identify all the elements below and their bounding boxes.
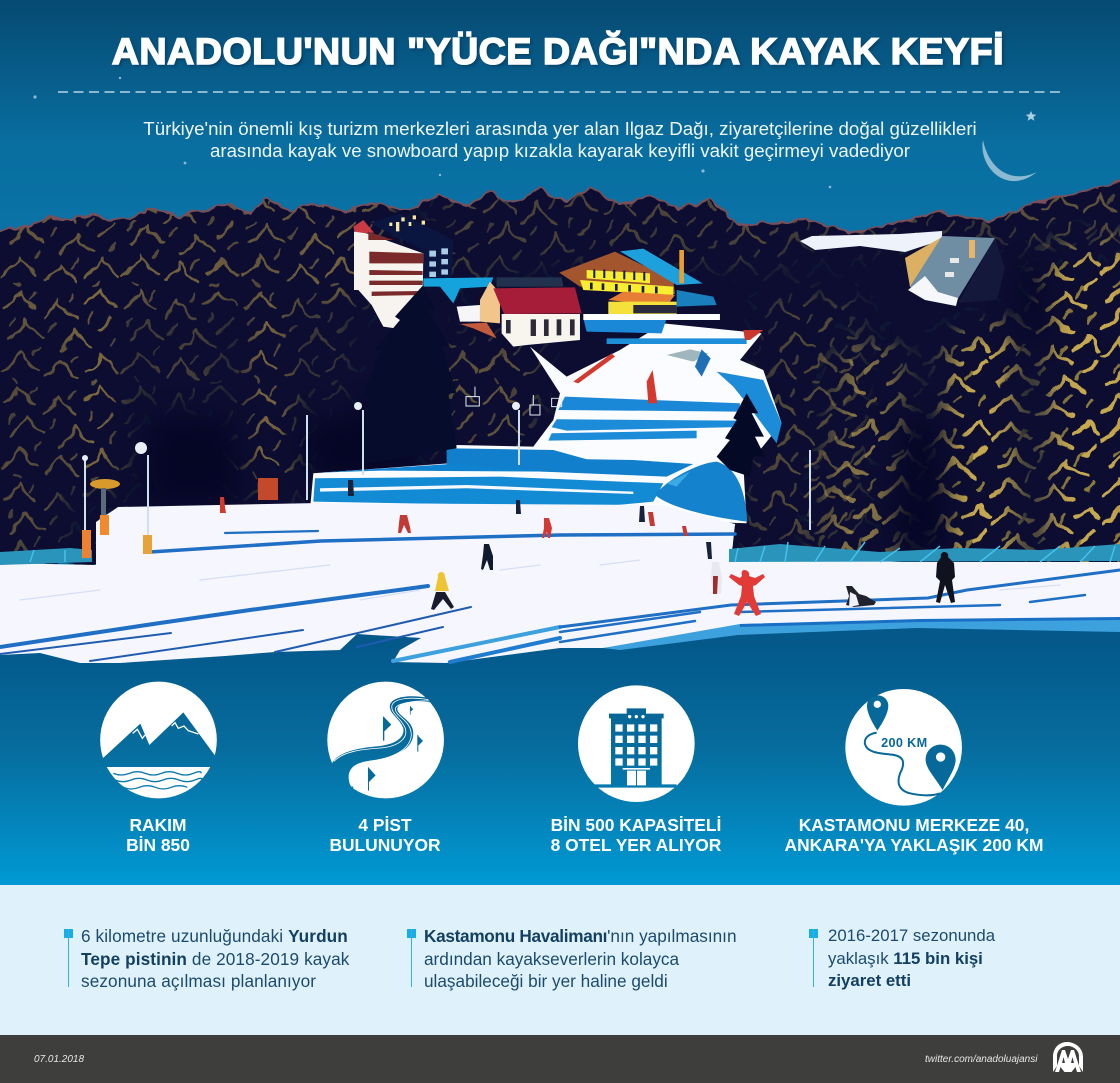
- icon: route map with pins: 200 KM: [881, 736, 927, 750]
- label: distance: [785, 815, 1043, 855]
- subtitle: [143, 118, 977, 161]
- fact: Yurdun Tepe: sezonuna açılması planlanıyor: [81, 971, 316, 991]
- skier red: [729, 570, 765, 616]
- buildings: [353, 213, 765, 477]
- skier yellow: [435, 572, 449, 591]
- icon: mountain and lake: [93, 682, 223, 798]
- subtitle: arasında kayak ve snowboard yapıp kızakla kayarak keyifli vakit geçirmeyi vadediyor: [210, 140, 910, 160]
- lamp posts: [82, 402, 810, 555]
- main snowfield: [0, 503, 1120, 663]
- label: pistes: [329, 815, 441, 855]
- forest brown highlights: [0, 187, 1120, 565]
- forest golden highlights: [785, 220, 1120, 562]
- dashed divider: [58, 91, 1063, 93]
- yellow chalet: [559, 249, 717, 315]
- fact: Kastamonu airport: [407, 926, 737, 991]
- fact: Yurdun Tepe: Tepe pistinin de 2018-2019 kayak: [81, 949, 349, 969]
- label: hotels: 8 OTEL YER ALIYOR: [551, 835, 721, 855]
- skier dark: [936, 552, 955, 603]
- sky: [0, 0, 1120, 262]
- social handle: twitter.com/anadoluajansi: [925, 1054, 1037, 1065]
- footer bar: [0, 1035, 1120, 1083]
- label: altitude: RAKIM: [130, 815, 186, 835]
- forest: [0, 179, 1120, 565]
- ski slope: [310, 318, 782, 523]
- label: distance: ANKARA'YA YAKLAŞIK 200 KM: [785, 835, 1043, 855]
- fact: visitors: [809, 926, 996, 990]
- fact: Yurdun Tepe: 6 kilometre uzunluğundaki Yurdun: [81, 926, 348, 946]
- lower gradient band: [0, 600, 1120, 885]
- chair lifts: [466, 387, 562, 415]
- fact: Kastamonu airport: Kastamonu Havalimanı'nın yapılmasının: [424, 926, 737, 946]
- hillside hotel right: [905, 236, 1005, 306]
- fact: Kastamonu airport: ardından kayakseverlerin kolayca: [424, 949, 679, 969]
- icon: hotel building: [578, 685, 695, 802]
- label: hotels: BİN 500 KAPASİTELİ: [551, 815, 721, 835]
- icon: Anadolu Agency logo: [1053, 1042, 1083, 1072]
- forest shadows: [150, 270, 1040, 552]
- date: 07.01.2018: [34, 1054, 84, 1065]
- label: altitude: BİN 850: [126, 835, 190, 855]
- label: pistes: 4 PİST: [358, 815, 412, 835]
- fact: Yurdun Tepe: [64, 926, 350, 991]
- skiers: [220, 480, 955, 616]
- stars and crescent moon: [33, 77, 1037, 188]
- label: altitude: [126, 815, 190, 855]
- fact: visitors: 2016-2017 sezonunda: [828, 926, 995, 945]
- icon: route map with pins: [845, 689, 962, 806]
- fact: visitors: ziyaret etti: [828, 971, 911, 990]
- red roof chalet: [423, 277, 582, 347]
- icon: winding piste with flags: [320, 682, 444, 807]
- label: distance: KASTAMONU MERKEZE 40,: [799, 815, 1029, 835]
- title: ANADOLU'NUN "YÜCE DAĞI"NDA KAYAK KEYFİ: [112, 30, 1004, 72]
- slope top structures: [573, 314, 763, 403]
- label: hotels: [551, 815, 721, 855]
- fact: Kastamonu airport: ulaşabileceği bir yer haline geldi: [424, 971, 668, 991]
- label: pistes: BULUNUYOR: [329, 835, 441, 855]
- snowy ground behind the top tree line: [800, 231, 942, 252]
- orange lift station: [82, 478, 278, 558]
- safety fences: [0, 542, 1120, 565]
- foreground dark trees: [360, 285, 457, 465]
- subtitle: Türkiye'nin önemli kış turizm merkezleri arasında yer alan Ilgaz Dağı, ziyaretçilerine doğal güzellikleri: [143, 118, 977, 139]
- white hotel: [353, 213, 453, 330]
- lower info panel: [0, 885, 1120, 1035]
- fact: visitors: yaklaşık 115 bin kişi: [828, 949, 983, 968]
